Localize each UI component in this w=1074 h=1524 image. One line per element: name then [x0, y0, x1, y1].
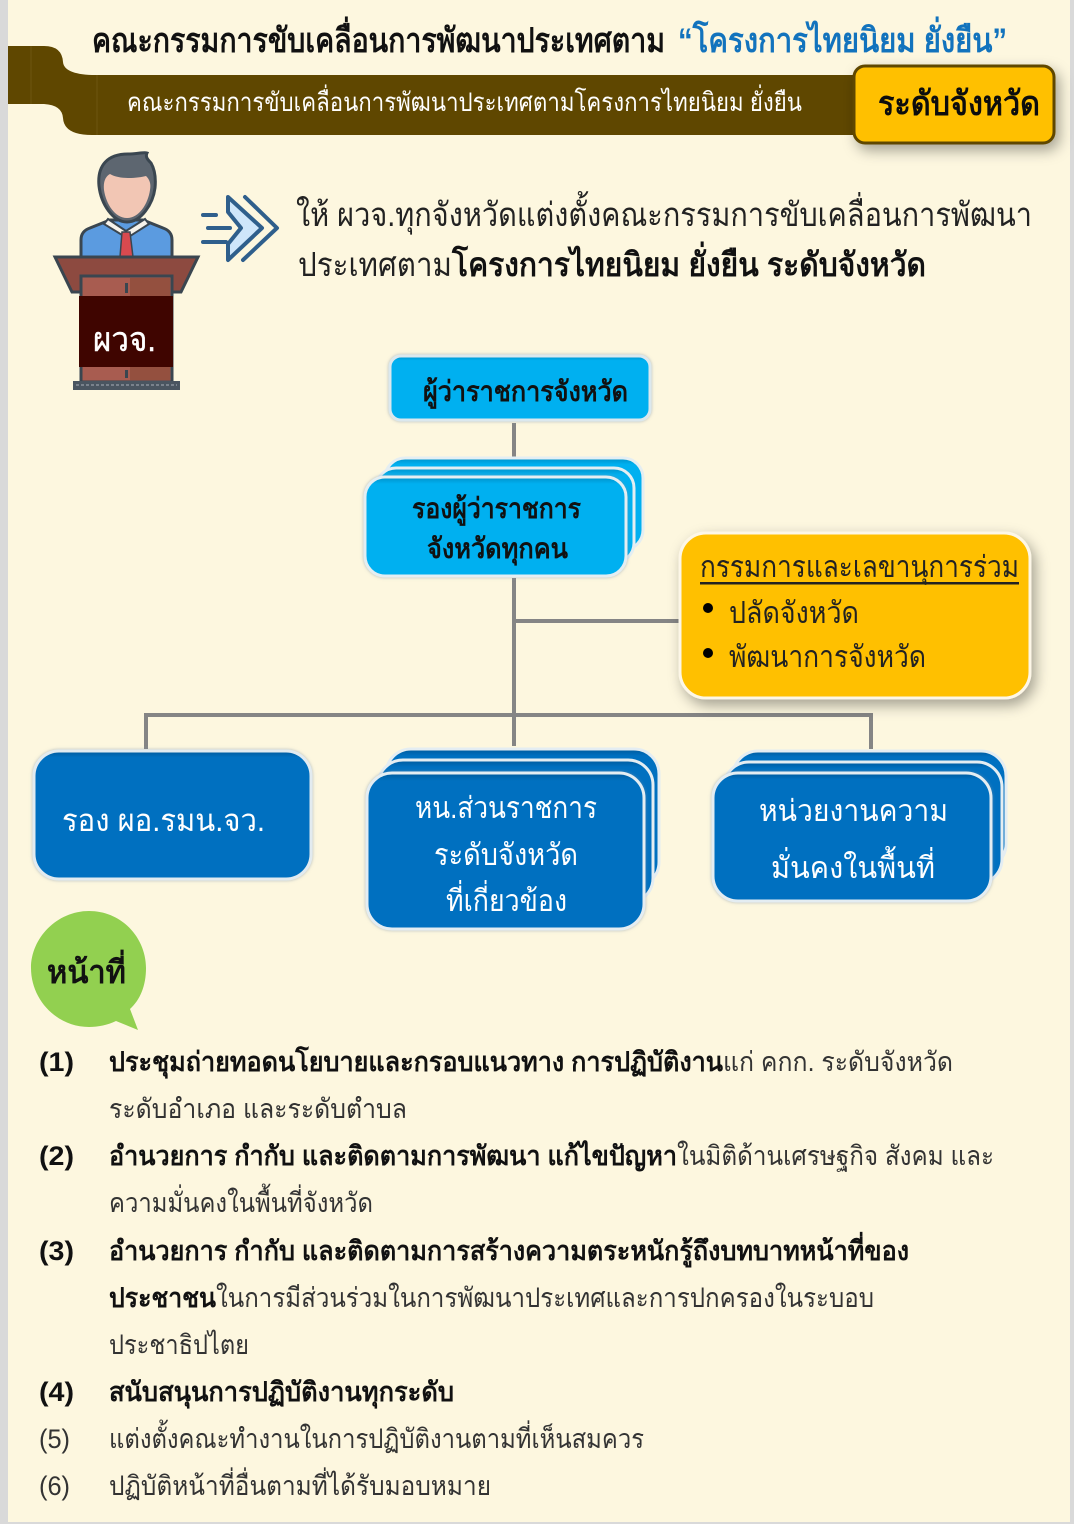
org chart connectors — [146, 423, 871, 749]
duty 1: ระดับอำเภอ และระดับตำบล — [109, 1094, 407, 1124]
duty 3: ประชาชน — [109, 1283, 216, 1313]
duty 2: ความมั่นคงในพื้นที่จังหวัด — [109, 1183, 373, 1218]
callout: committee and joint secretaries: ปลัดจังหวัด — [729, 597, 859, 630]
callout: committee and joint secretaries: พัฒนาการจังหวัด — [729, 641, 926, 674]
box: provincial agency heads stack: ระดับจังหวัด — [434, 839, 578, 872]
duty 6: ปฏิบัติหน้าที่อื่นตามที่ได้รับมอบหมาย — [109, 1467, 491, 1501]
duties list — [39, 1045, 994, 1501]
podium label — [79, 296, 173, 367]
duty 2: อำนวยการ กำกับ และติดตามการพัฒนา แก้ไขปัญหา — [109, 1140, 677, 1172]
box: provincial agency heads stack: หน.ส่วนราชการ — [415, 792, 597, 825]
duty 4: (4) — [39, 1377, 74, 1407]
box: governor: ผู้ว่าราชการจังหวัด — [423, 376, 628, 409]
callout: committee and joint secretaries: กรรมการและเลขานุการร่วม — [700, 551, 1019, 586]
box: deputy director — [34, 751, 311, 879]
icon: speaker at podium: ผวจ. — [93, 321, 156, 359]
title: “โครงการไทยนิยม ยั่งยืน” — [678, 16, 1007, 60]
level badge — [854, 66, 1054, 143]
duty 3: (3) — [39, 1236, 74, 1266]
duty 5: แต่งตั้งคณะทำงานในการปฏิบัติงานตามที่เห็นสมควร — [109, 1419, 644, 1454]
box: security agencies stack: หน่วยงานความ — [759, 795, 948, 828]
box: vice governors stack: รองผู้ว่าราชการ — [412, 493, 581, 526]
title — [92, 16, 1007, 60]
box: provincial agency heads stack — [367, 749, 659, 929]
header ribbon — [8, 46, 856, 135]
duty 2: ในมิติด้านเศรษฐกิจ สังคม และ — [677, 1140, 994, 1172]
level badge: ระดับจังหวัด — [878, 85, 1040, 123]
box: vice governors stack — [365, 458, 643, 576]
intro text: ประเทศตาม — [298, 246, 452, 283]
intro text — [296, 191, 1032, 283]
icon: double arrow — [203, 197, 277, 260]
duty 1: ประชุมถ่ายทอดนโยบายและกรอบแนวทาง การปฏิบัติงาน — [109, 1045, 723, 1079]
duty 3: ประชาธิปไตย — [109, 1330, 249, 1360]
icon: speaker at podium — [55, 153, 198, 390]
box: provincial agency heads stack: ที่เกี่ยวข้อง — [446, 880, 567, 918]
box: governor — [390, 356, 650, 420]
header subtitle: คณะกรรมการขับเคลื่อนการพัฒนาประเทศตามโครงการไทยนิยม ยั่งยืน — [127, 84, 802, 117]
box: vice governors stack: จังหวัดทุกคน — [427, 533, 568, 566]
duty 5: (5) — [39, 1424, 70, 1454]
title: คณะกรรมการขับเคลื่อนการพัฒนาประเทศตาม — [92, 16, 665, 60]
duty 2 — [39, 1140, 994, 1218]
duty 1: (1) — [39, 1047, 74, 1077]
duty 6 — [39, 1467, 491, 1501]
box: security agencies stack — [713, 751, 1006, 901]
duty 3: ในการมีส่วนร่วมในการพัฒนาประเทศและการปกครองในระบอบ — [216, 1282, 874, 1313]
intro text: โครงการไทยนิยม ยั่งยืน ระดับจังหวัด — [451, 241, 926, 283]
duties badge: หน้าที่ — [47, 949, 126, 990]
duty 1 — [39, 1045, 953, 1124]
duty 6: (6) — [39, 1471, 70, 1501]
duty 1: แก่ คกก. ระดับจังหวัด — [723, 1047, 953, 1077]
duty 3: อำนวยการ กำกับ และติดตามการสร้างความตระหนักรู้ถึงบทบาทหน้าที่ของ — [109, 1231, 909, 1268]
box: security agencies stack: มั่นคงในพื้นที่ — [771, 846, 935, 885]
box: deputy director: รอง ผอ.รมน.จว. — [62, 803, 265, 838]
duty 4: สนับสนุนการปฏิบัติงานทุกระดับ — [109, 1377, 454, 1409]
duty 5 — [39, 1419, 644, 1454]
duty 2: (2) — [39, 1141, 74, 1171]
callout: committee and joint secretaries — [680, 533, 1030, 698]
duty 3 — [39, 1231, 909, 1360]
duties badge — [31, 911, 146, 1030]
